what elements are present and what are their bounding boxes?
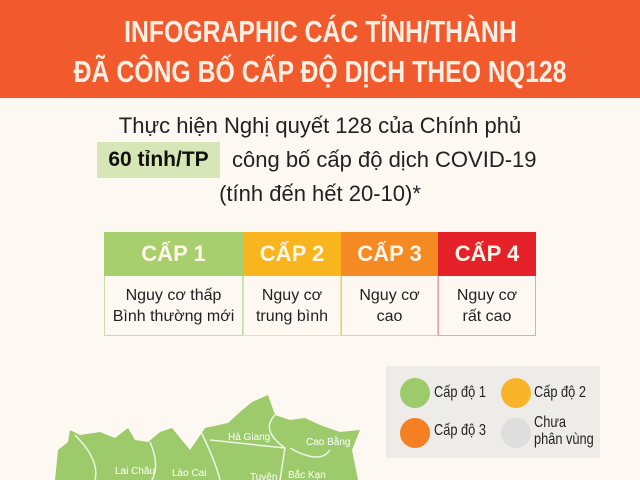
header band [0, 0, 640, 98]
legend: Cấp độ 1 [434, 384, 486, 401]
level 4 [438, 232, 536, 276]
highlight: 60 provinces [97, 142, 220, 178]
title line 2: ĐÃ CÔNG BỐ CẤP ĐỘ DỊCH THEO NQ128 [74, 54, 566, 89]
legend: Cấp độ 2 [534, 384, 586, 401]
level 2 [243, 232, 341, 276]
level table: Nguy cơ [457, 287, 517, 304]
level table: Nguy cơ [262, 287, 322, 304]
level 1 [104, 232, 243, 276]
map of northern provinces: Lai Châu [115, 466, 155, 477]
subtitle text block: Thực hiện Nghị quyết 128 của Chính phủ [119, 113, 521, 138]
level table: cao [377, 308, 402, 325]
legend: Chưa [534, 414, 566, 431]
map of northern provinces: Lào Cai [172, 468, 206, 479]
level table: Bình thường mới [113, 308, 234, 325]
level 3: CẤP 3 [357, 241, 422, 266]
legend [386, 366, 600, 458]
subtitle text block: công bố cấp độ dịch COVID-19 [232, 147, 537, 172]
legend: level 2 [501, 378, 531, 408]
map of northern provinces: Cao Bằng [306, 435, 350, 448]
level 4: CẤP 4 [455, 241, 519, 266]
title line 1: INFOGRAPHIC CÁC TỈNH/THÀNH [124, 14, 516, 49]
subtitle text block: (tính đến hết 20-10)* [219, 181, 421, 206]
level table: trung bình [256, 308, 328, 325]
legend: Cấp độ 3 [434, 422, 486, 439]
level table: Nguy cơ [359, 287, 420, 304]
legend: unclassified [501, 418, 531, 448]
subtitle text block [97, 113, 537, 206]
level table: rất cao [463, 308, 511, 325]
highlight: 60 provinces: 60 tỉnh/TP [108, 148, 209, 171]
level table [104, 232, 536, 336]
legend: level 3 [400, 418, 430, 448]
map of northern provinces [55, 395, 360, 480]
level 2: CẤP 2 [260, 241, 324, 266]
map of northern provinces: Hà Giang [228, 432, 270, 443]
legend: level 1 [400, 378, 430, 408]
level 1: CẤP 1 [141, 241, 206, 266]
level table: Nguy cơ thấp [126, 287, 221, 304]
level 3 [341, 232, 438, 276]
legend: phân vùng [534, 431, 594, 448]
